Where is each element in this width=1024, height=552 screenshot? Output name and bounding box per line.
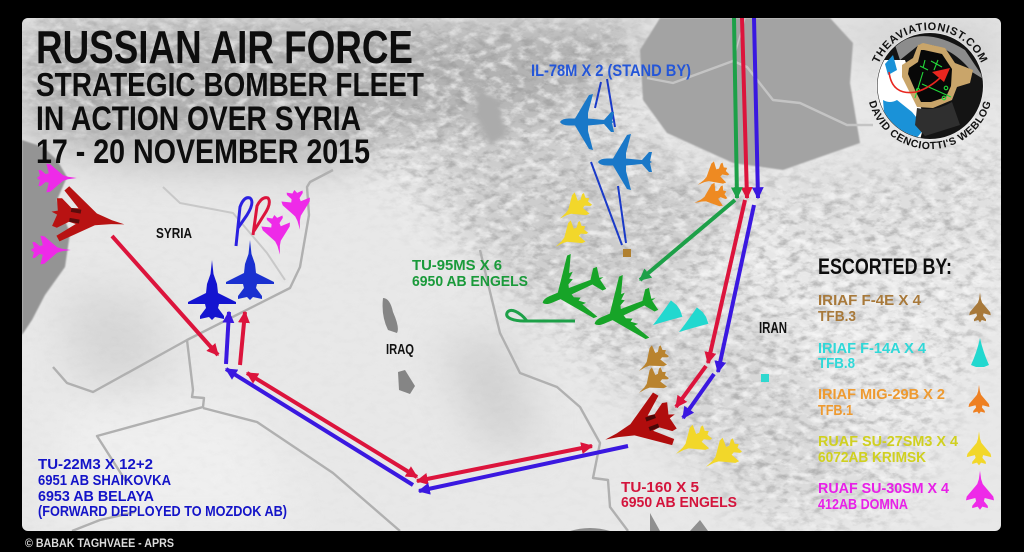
text: Tu-22M3 label: 6951 AB SHAIKOVKA (38, 472, 171, 489)
text: Tu-22M3 label: TU-22M3 X 12+2 (38, 456, 153, 473)
arrows: blue route (226, 18, 758, 491)
country label: Iran: IRAN (759, 320, 787, 337)
icon: Su-27 escorts yellow (548, 187, 747, 479)
icon: Il-78 lower (598, 134, 652, 190)
legend: Su-30SM: 412AB DOMNA (818, 496, 908, 513)
legend: Su-27SM3: RUAF SU-27SM3 X 4 (818, 433, 959, 450)
icon: Tu-160 over Iran (596, 388, 684, 466)
arrows: green route (640, 18, 737, 280)
icon: F-14 escorts cyan (647, 299, 710, 340)
holding pattern: green (507, 310, 575, 321)
legend: F-14A: TFB.8 (818, 355, 855, 372)
legend: F-14A (818, 338, 989, 372)
logo: The Aviationist badge (869, 22, 990, 150)
text: Tu-22M3 label: (FORWARD DEPLOYED TO MOZDOK AB) (38, 503, 287, 520)
text: Tu-95 label: 6950 AB ENGELS (412, 273, 528, 290)
marker: Hamedan base (761, 374, 769, 382)
arrows: Il-78 tanker link lines (591, 79, 626, 245)
Caspian Sea (640, 18, 860, 170)
legend: F-4E (818, 292, 991, 325)
text: Tu-160 label: 6950 AB ENGELS (621, 494, 737, 511)
text: Tu-22M3 label: 6953 AB BELAYA (38, 488, 154, 505)
title: IN ACTION OVER SYRIA (36, 100, 361, 138)
Borders (53, 18, 873, 531)
legend: F-14A: IRIAF F-14A X 4 (818, 340, 927, 357)
Lakes (383, 298, 415, 394)
legend: F-4E: IRIAF F-4E X 4 (818, 292, 922, 309)
icon: Tu-22M3 right (226, 240, 274, 300)
icon: Tu-160 over Syria (47, 184, 129, 252)
text: Tu-95 label: TU-95MS X 6 (412, 257, 502, 274)
marker: tanker base (623, 249, 631, 257)
icon: MiG-29 escorts orange (690, 157, 733, 215)
legend: MiG-29B: TFB.1 (818, 402, 853, 419)
heading: escorted by: ESCORTED BY: (818, 254, 952, 279)
legend: Su-27SM3: 6072AB KRIMSK (818, 449, 926, 466)
icon: Il-78 upper (560, 94, 614, 150)
country label: Iraq: IRAQ (386, 341, 414, 358)
text: Il-78 label: IL-78M X 2 (STAND BY) (531, 61, 691, 80)
icon: Tu-22M3 left (188, 260, 236, 320)
text: Tu-95 label (412, 257, 528, 290)
holding pattern: blue (236, 198, 252, 246)
text: Tu-160 label (621, 479, 737, 511)
text: Tu-160 label: TU-160 X 5 (621, 479, 699, 496)
legend: Su-30SM (818, 471, 994, 513)
arrows: red route (112, 18, 747, 481)
credit: © BABAK TAGHVAEE - APRS (25, 538, 174, 550)
logo: The Aviationist badge: THEAVIATIONIST.COM (872, 22, 988, 62)
logo: The Aviationist badge: DAVID CENCIOTTI'S WEBLOG (869, 100, 990, 150)
legend: MiG-29B: IRIAF MIG-29B X 2 (818, 386, 945, 403)
legend: Su-30SM: RUAF SU-30SM X 4 (818, 480, 950, 497)
title: 17 - 20 NOVEMBER 2015 (36, 133, 370, 171)
title: RUSSIAN AIR FORCE (36, 21, 413, 73)
title: STRATEGIC BOMBER FLEET (36, 66, 424, 103)
icon: Tu-95 right (581, 267, 669, 355)
holding pattern: red (253, 198, 269, 235)
icon: F-4 escorts brown (632, 340, 673, 403)
title (36, 21, 424, 171)
icon: Tu-95 left (529, 246, 617, 334)
Persian Gulf (570, 513, 708, 531)
legend: F-4E: TFB.3 (818, 308, 856, 325)
country label: Syria: SYRIA (156, 225, 192, 242)
icon: Su-30 escorts magenta (31, 164, 314, 264)
legend: MiG-29B (818, 385, 989, 419)
legend: Su-27SM3 (818, 431, 991, 466)
text: Tu-22M3 label (38, 456, 287, 520)
Mediterranean Sea (22, 140, 70, 335)
